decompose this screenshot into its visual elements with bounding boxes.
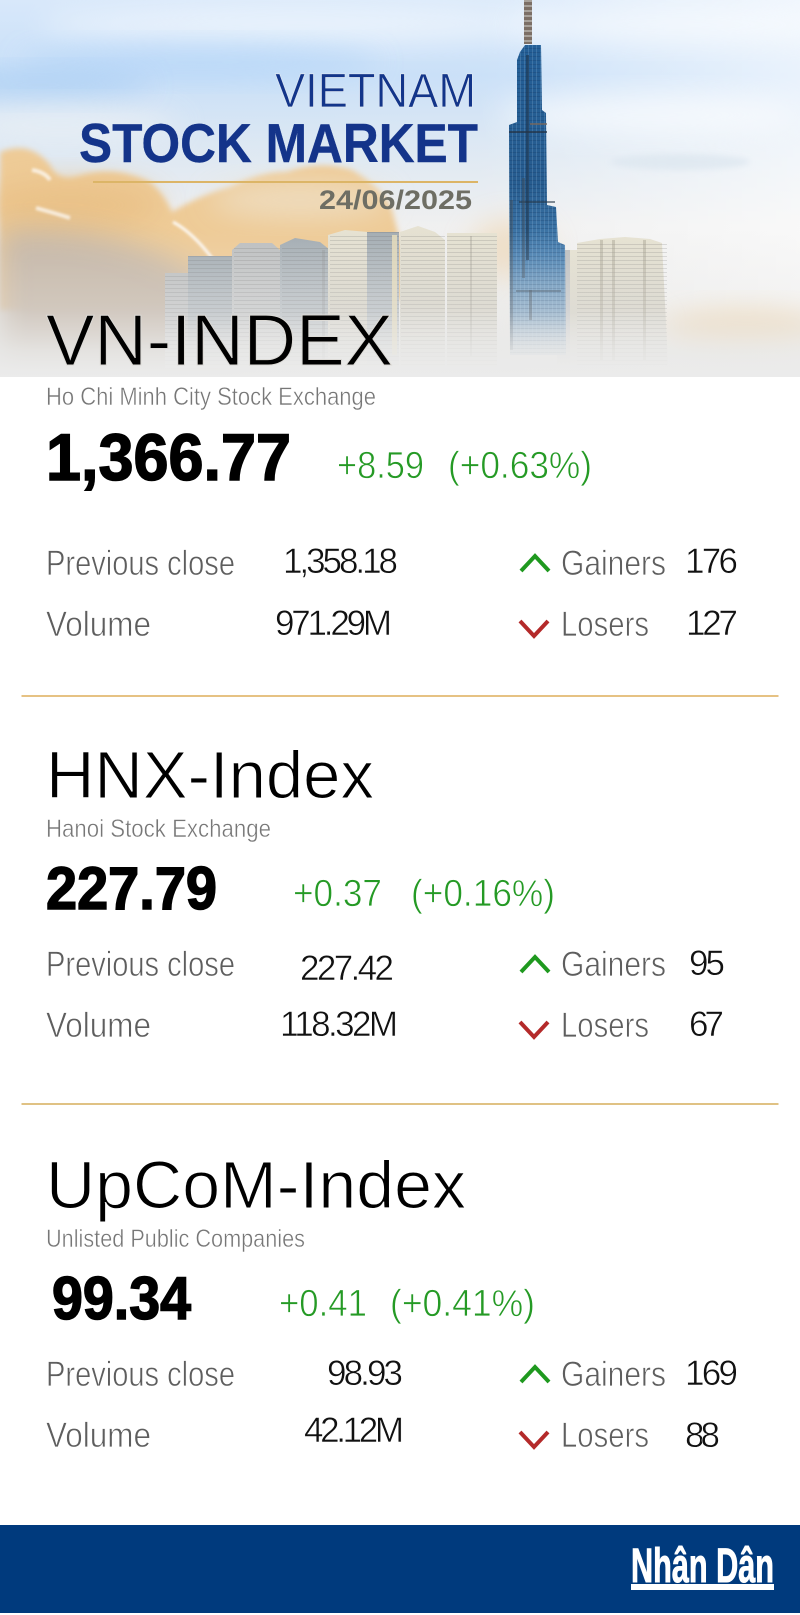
- volume value: 42.12M: [304, 1411, 404, 1450]
- heading: VN-INDEX: VN-INDEX: [46, 301, 393, 381]
- hero left tower blocks: [165, 226, 497, 353]
- icon: up chevron: [521, 957, 549, 972]
- gainers value: 95: [689, 944, 725, 983]
- losers value: 127: [686, 604, 738, 643]
- hero sky background: [0, 0, 800, 330]
- hero orange clouds: [0, 148, 800, 370]
- HNX subtitle: Hanoi Stock Exchange: [46, 815, 271, 843]
- losers value: 88: [685, 1416, 720, 1455]
- gainers label: Gainers: [561, 945, 666, 984]
- VN-Index change: +8.59: [337, 445, 424, 487]
- icon: down chevron: [520, 621, 548, 636]
- panel: HNX-Index stats: [46, 738, 725, 1045]
- previous close label: Previous close: [46, 544, 235, 583]
- VN-Index subtitle: Ho Chi Minh City Stock Exchange: [46, 383, 376, 411]
- icon: down chevron: [520, 1022, 548, 1037]
- losers label: Losers: [561, 1416, 649, 1455]
- title rule: [93, 181, 478, 183]
- HNX value: 227.79: [46, 855, 217, 922]
- gainers value: 169: [685, 1354, 738, 1393]
- volume value: 118.32M: [280, 1005, 398, 1044]
- UpCoM value: 99.34: [52, 1265, 192, 1332]
- HNX change percent: (+0.16%): [411, 873, 555, 915]
- icon: up chevron: [521, 1367, 549, 1382]
- title line: VIETNAM: VIETNAM: [275, 65, 476, 118]
- previous close value: 1,358.18: [283, 542, 398, 581]
- title line: STOCK MARKET: STOCK MARKET: [79, 112, 478, 174]
- gainers label: Gainers: [561, 544, 666, 583]
- volume value: 971.29M: [275, 604, 392, 643]
- previous close value: 227.42: [300, 949, 394, 988]
- hero right tower blocks: [565, 237, 667, 353]
- previous close label: Previous close: [46, 945, 235, 984]
- footer band: [0, 1525, 800, 1613]
- HNX change: +0.37: [293, 873, 382, 915]
- UpCoM change percent: (+0.41%): [390, 1283, 535, 1325]
- icon: Landmark 81 skyscraper: [509, 0, 566, 355]
- volume label: Volume: [46, 605, 151, 644]
- VN-Index change percent: (+0.63%): [448, 445, 592, 487]
- icon: up chevron: [521, 556, 549, 571]
- UpCoM change: +0.41: [279, 1283, 367, 1325]
- gainers value: 176: [685, 542, 738, 581]
- losers value: 67: [689, 1005, 724, 1044]
- icon: down chevron: [520, 1432, 548, 1447]
- panel: UpCoM-Index stats: [46, 1148, 738, 1455]
- panel: hero header: [0, 0, 800, 381]
- previous close value: 98.93: [327, 1354, 403, 1393]
- losers label: Losers: [561, 1006, 649, 1045]
- hero bottom haze: [0, 230, 800, 377]
- previous close label: Previous close: [46, 1355, 235, 1394]
- volume label: Volume: [46, 1006, 151, 1045]
- losers label: Losers: [561, 605, 649, 644]
- VN-Index value: 1,366.77: [46, 420, 291, 494]
- date: 24/06/2025: [319, 185, 472, 215]
- UpCoM subtitle: Unlisted Public Companies: [46, 1225, 305, 1253]
- gainers label: Gainers: [561, 1355, 666, 1394]
- panel: VN-Index stats: [46, 383, 738, 644]
- heading: UpCoM-Index: UpCoM-Index: [46, 1148, 466, 1223]
- heading: HNX-Index: HNX-Index: [46, 738, 374, 813]
- volume label: Volume: [46, 1416, 151, 1455]
